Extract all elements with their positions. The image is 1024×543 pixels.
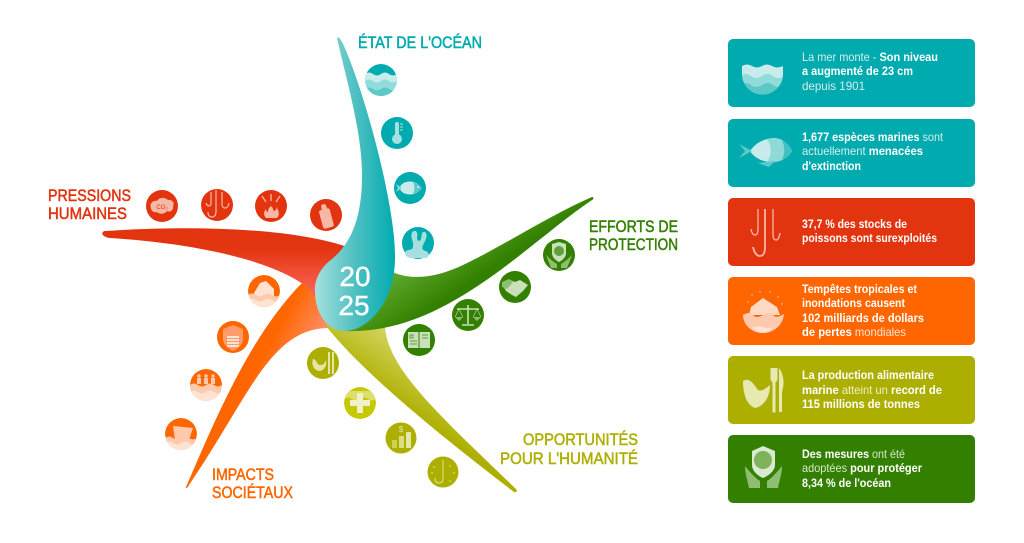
icon: fish [739, 138, 792, 167]
text: food production: marine atteint un record de [802, 383, 942, 397]
text: protection measures [802, 447, 922, 490]
text: storms [802, 282, 924, 339]
heading: pressions humaines: PRESSIONS [48, 186, 131, 205]
petal: état de l'océan [315, 37, 395, 331]
petal: opportunités pour l'humanité [326, 326, 517, 492]
icon: food [307, 347, 339, 379]
heading: opportunités pour l'humanité [500, 430, 638, 468]
heading: impacts sociétaux: SOCIÉTAUX [212, 483, 293, 502]
icon: scales [452, 299, 484, 331]
year 2025 [338, 261, 371, 321]
icon: open book [403, 324, 435, 356]
text: overexploited stocks: 37,7 % des stocks de [802, 217, 907, 231]
panel: marine species [728, 119, 975, 187]
text: food production: 115 millions de tonnes [802, 397, 920, 411]
petal: impacts sociétaux [186, 282, 335, 488]
icon: fishing hooks [201, 189, 233, 221]
icon: coral [402, 227, 434, 259]
text: storms: inondations causent [802, 296, 905, 310]
text: sea level [802, 50, 938, 93]
text: overexploited stocks [802, 217, 937, 245]
icon: CO2 cloud: CO₂ [156, 205, 168, 211]
text: protection measures: 8,34 % de l'océan [802, 476, 891, 490]
panel: storms [728, 277, 975, 345]
icon: ocean warming [255, 190, 287, 222]
icon: CO2 cloud [146, 190, 178, 222]
icon: storm house [743, 291, 784, 333]
petal: pressions humaines [102, 228, 350, 312]
heading: pressions humaines: HUMAINES [48, 204, 127, 223]
panel: food production [728, 356, 975, 424]
icon: sea level [365, 64, 397, 96]
star diagram [102, 37, 593, 492]
icon: shield hands [745, 446, 782, 488]
heading: efforts de protection [589, 217, 678, 254]
text: sea level: a augmenté de 23 cm [802, 64, 913, 78]
icon: hooks [751, 209, 780, 256]
text: sea level: depuis 1901 [802, 79, 865, 93]
heading: impacts sociétaux [212, 465, 293, 502]
icon: storm house [248, 275, 280, 307]
text: protection measures: Des mesures ont été [802, 447, 905, 461]
icon: night hook [428, 456, 458, 488]
heading: pressions humaines [48, 186, 131, 223]
icon: finance: $ [399, 425, 404, 434]
icon: handshake [499, 271, 531, 303]
text: food production [802, 368, 942, 411]
text: food production: La production alimentaire [802, 368, 934, 382]
year 2025: 20 [339, 261, 371, 292]
icon: people flood [190, 369, 222, 401]
panel: overexploited stocks [728, 198, 975, 266]
text: storms: 102 milliards de dollars [802, 311, 924, 325]
icon: sinking building [165, 418, 197, 450]
petal: efforts de protection [345, 197, 594, 331]
heading: opportunités pour l'humanité: OPPORTUNITÉS [523, 430, 638, 449]
icon: protective hands [543, 239, 575, 271]
heading: opportunités pour l'humanité: POUR L'HUMANITÉ [500, 449, 638, 468]
panel: protection measures [728, 435, 975, 503]
year 2025: 25 [338, 290, 370, 321]
text: protection measures: adoptées pour protéger [802, 461, 922, 475]
heading: efforts de protection: EFFORTS DE [589, 217, 678, 236]
text: marine species: 1,677 espèces marines sont [802, 130, 944, 144]
icon: medical cross [344, 387, 376, 419]
text: marine species [802, 130, 944, 173]
text: marine species: actuellement menacées [802, 144, 923, 158]
heading: état de l'océan: ÉTAT DE L'OCÉAN [358, 33, 482, 52]
icon: shield money [217, 321, 249, 353]
heading: efforts de protection: PROTECTION [589, 235, 678, 254]
heading: impacts sociétaux: IMPACTS [212, 465, 274, 484]
text: marine species: d'extinction [802, 159, 861, 173]
text: storms: Tempêtes tropicales et [802, 282, 917, 296]
panel: sea level [728, 39, 975, 107]
icon: shrimp and cutlery [743, 368, 784, 412]
icon: plastic bottle [310, 199, 342, 231]
icon: thermometer [381, 117, 413, 149]
icon: finance [386, 422, 416, 454]
text: storms: de pertes mondiales [802, 325, 906, 339]
text: sea level: La mer monte - Son niveau [802, 50, 938, 64]
text: overexploited stocks: poissons sont surexploités [802, 231, 937, 245]
icon: fish [394, 172, 426, 204]
icon: sea bowl [742, 64, 783, 94]
